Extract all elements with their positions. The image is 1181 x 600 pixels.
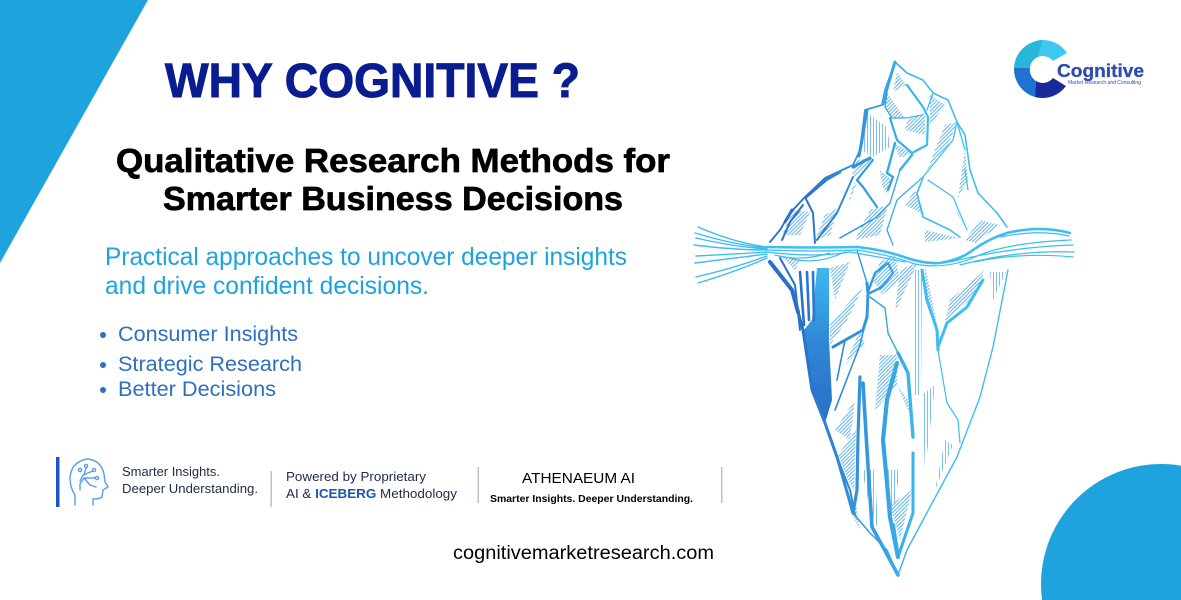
subtitle: Practical approaches to uncover deeper insights	[105, 243, 627, 271]
iceberg lower cracks	[857, 250, 867, 283]
tagline text: Deeper Understanding.	[122, 481, 258, 496]
subtitle	[105, 243, 627, 300]
iceberg dark column	[804, 268, 832, 423]
bullet list: Strategic Research	[118, 352, 302, 376]
logo: Cognitive	[1057, 60, 1144, 81]
divider	[721, 467, 722, 503]
powered by text: Powered by Proprietary	[286, 469, 427, 484]
corner triangle	[0, 0, 148, 263]
athenaeum text: Smarter Insights. Deeper Understanding.	[490, 493, 693, 505]
iceberg upper cracks	[890, 85, 928, 153]
logo: Market Research and Consulting	[1068, 80, 1141, 86]
icon: iceberg	[694, 62, 1074, 575]
logo	[1014, 40, 1144, 98]
powered by text: AI & ICEBERG Methodology	[286, 486, 458, 501]
icon: head with circuit nodes	[70, 459, 108, 505]
bullet list: Consumer Insights	[118, 322, 298, 346]
title: Smarter Business Decisions	[163, 180, 623, 217]
heading: why cognitive: WHY COGNITIVE ?	[165, 55, 580, 108]
bullet list	[100, 322, 302, 401]
divider	[270, 471, 272, 507]
iceberg lower outline	[792, 290, 853, 513]
powered by text	[286, 469, 458, 501]
title: Qualitative Research Methods for	[116, 142, 670, 179]
iceberg hatching	[780, 72, 1006, 540]
title	[116, 142, 670, 217]
tagline text: Smarter Insights.	[122, 464, 220, 479]
iceberg above water outline	[770, 62, 895, 242]
subtitle: and drive confident decisions.	[105, 272, 429, 300]
divider	[478, 467, 479, 503]
iceberg water strands	[694, 227, 767, 283]
website url: cognitivemarketresearch.com	[453, 543, 714, 564]
brand bar	[56, 457, 60, 507]
athenaeum text	[490, 471, 693, 505]
bullet list: Better Decisions	[118, 377, 276, 401]
tagline text	[122, 464, 258, 496]
athenaeum text: ATHENAEUM AI	[522, 471, 635, 487]
corner circle	[1041, 464, 1181, 600]
